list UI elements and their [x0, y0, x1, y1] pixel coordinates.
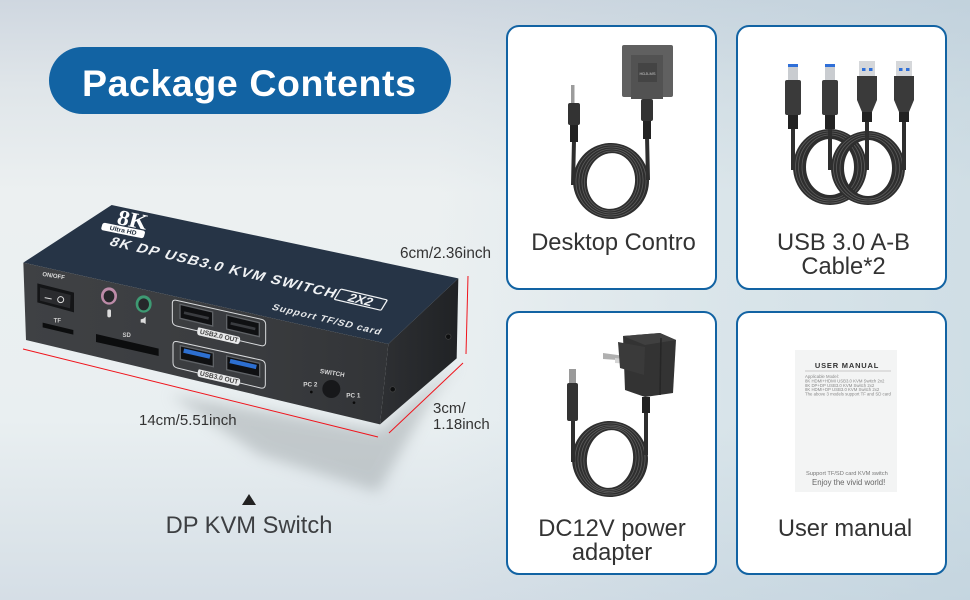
- card: power adapter: [507, 312, 716, 574]
- PC switch group: SWITCH: [319, 368, 346, 379]
- front face: [23, 263, 388, 424]
- PC switch group: PC 2: [303, 381, 318, 388]
- card: USB cables: [737, 26, 946, 289]
- shadow under device: [170, 362, 458, 492]
- right side face: [380, 278, 458, 424]
- USB-A plug 1: [857, 61, 877, 122]
- top label: 8K DP USB3.0 KVM SWITCH: [106, 235, 339, 301]
- USB 3.0 ports: [173, 341, 265, 388]
- label: [538, 516, 686, 566]
- card: desktop controller: [507, 26, 716, 289]
- controller cable leads: [573, 136, 648, 185]
- TF slot: TF: [54, 319, 61, 325]
- dimension: depth: [433, 400, 490, 433]
- 3.5mm jack: [568, 85, 580, 142]
- audio jack: [136, 295, 152, 324]
- 8K Ultra HD logo: [101, 203, 151, 239]
- label: Cable*2: [801, 254, 886, 280]
- side screws: [390, 334, 451, 392]
- adapter cable coil: [567, 416, 653, 502]
- USB 3.0 ports: USB3.0 OUT: [199, 370, 239, 386]
- dimension: depth: 3cm/: [433, 400, 466, 417]
- 8K Ultra HD logo: 8K: [115, 205, 151, 234]
- SD slot: [96, 333, 159, 356]
- label: User manual: [778, 516, 912, 542]
- pointer triangle: [242, 494, 256, 505]
- title: Package Contents: [49, 47, 451, 114]
- manual booklet: Applicable Model:: [805, 374, 839, 379]
- title: Package Contents: Package Contents: [82, 62, 416, 104]
- USB-B plug 1: [785, 64, 801, 129]
- top label: 2X2: [345, 291, 376, 309]
- manual booklet: Enjoy the vivid world!: [812, 478, 885, 487]
- USB 2.0 ports: USB2.0 OUT: [199, 329, 239, 344]
- manual booklet: 8K DP+DP USB3.0 KVM Switch 2x2: [805, 383, 875, 388]
- label: [777, 230, 910, 280]
- TF slot: [43, 319, 73, 335]
- top face: [23, 205, 458, 344]
- power switch: ON/OFF: [42, 272, 65, 281]
- SD slot: SD: [123, 333, 131, 339]
- support label: Support TF/SD card: [269, 303, 383, 337]
- manual booklet: The above 3 models support TF and SD card: [805, 392, 892, 396]
- 8K Ultra HD logo: Ultra HD: [109, 225, 137, 237]
- USB 2.0 ports: [172, 300, 266, 346]
- manual booklet: USER MANUAL: [815, 361, 879, 370]
- device caption: DP KVM Switch: [166, 513, 332, 539]
- cable coils: [793, 122, 905, 205]
- manual booklet: 8K HDMI+DP USB3.0 KVM Switch 2x2: [805, 387, 880, 392]
- dimension: height: 6cm/2.36inch: [400, 245, 491, 262]
- dimension lines: [23, 276, 468, 437]
- adapter cable leads: [573, 410, 646, 462]
- mic jack: [101, 287, 117, 317]
- card: user manual: [737, 312, 946, 574]
- dimension: length: 14cm/5.51inch: [139, 412, 237, 429]
- wall plug: [603, 333, 676, 413]
- manual booklet: Support TF/SD card KVM switch: [806, 471, 888, 477]
- label: Desktop Contro: [531, 230, 696, 256]
- product: KVM switch: [23, 203, 458, 424]
- label: DC12V power: [538, 516, 686, 542]
- power switch: [37, 272, 74, 312]
- manual booklet: [795, 350, 897, 492]
- controller module: [622, 45, 673, 139]
- controller cable coil: [568, 138, 654, 224]
- label: adapter: [572, 540, 652, 566]
- PC switch group: [303, 368, 361, 404]
- PC switch group: PC 1: [346, 393, 361, 400]
- label: USB 3.0 A-B: [777, 230, 910, 256]
- DC barrel plug: [567, 369, 578, 421]
- USB-B plug 2: [822, 64, 838, 129]
- manual booklet: 8K HDMI+HDMI USB3.0 KVM Switch 2x2: [805, 378, 885, 384]
- controller module: HDJLMS: [639, 71, 656, 76]
- USB-A plug 2: [894, 61, 914, 122]
- dimension: depth: 1.18inch: [433, 416, 490, 433]
